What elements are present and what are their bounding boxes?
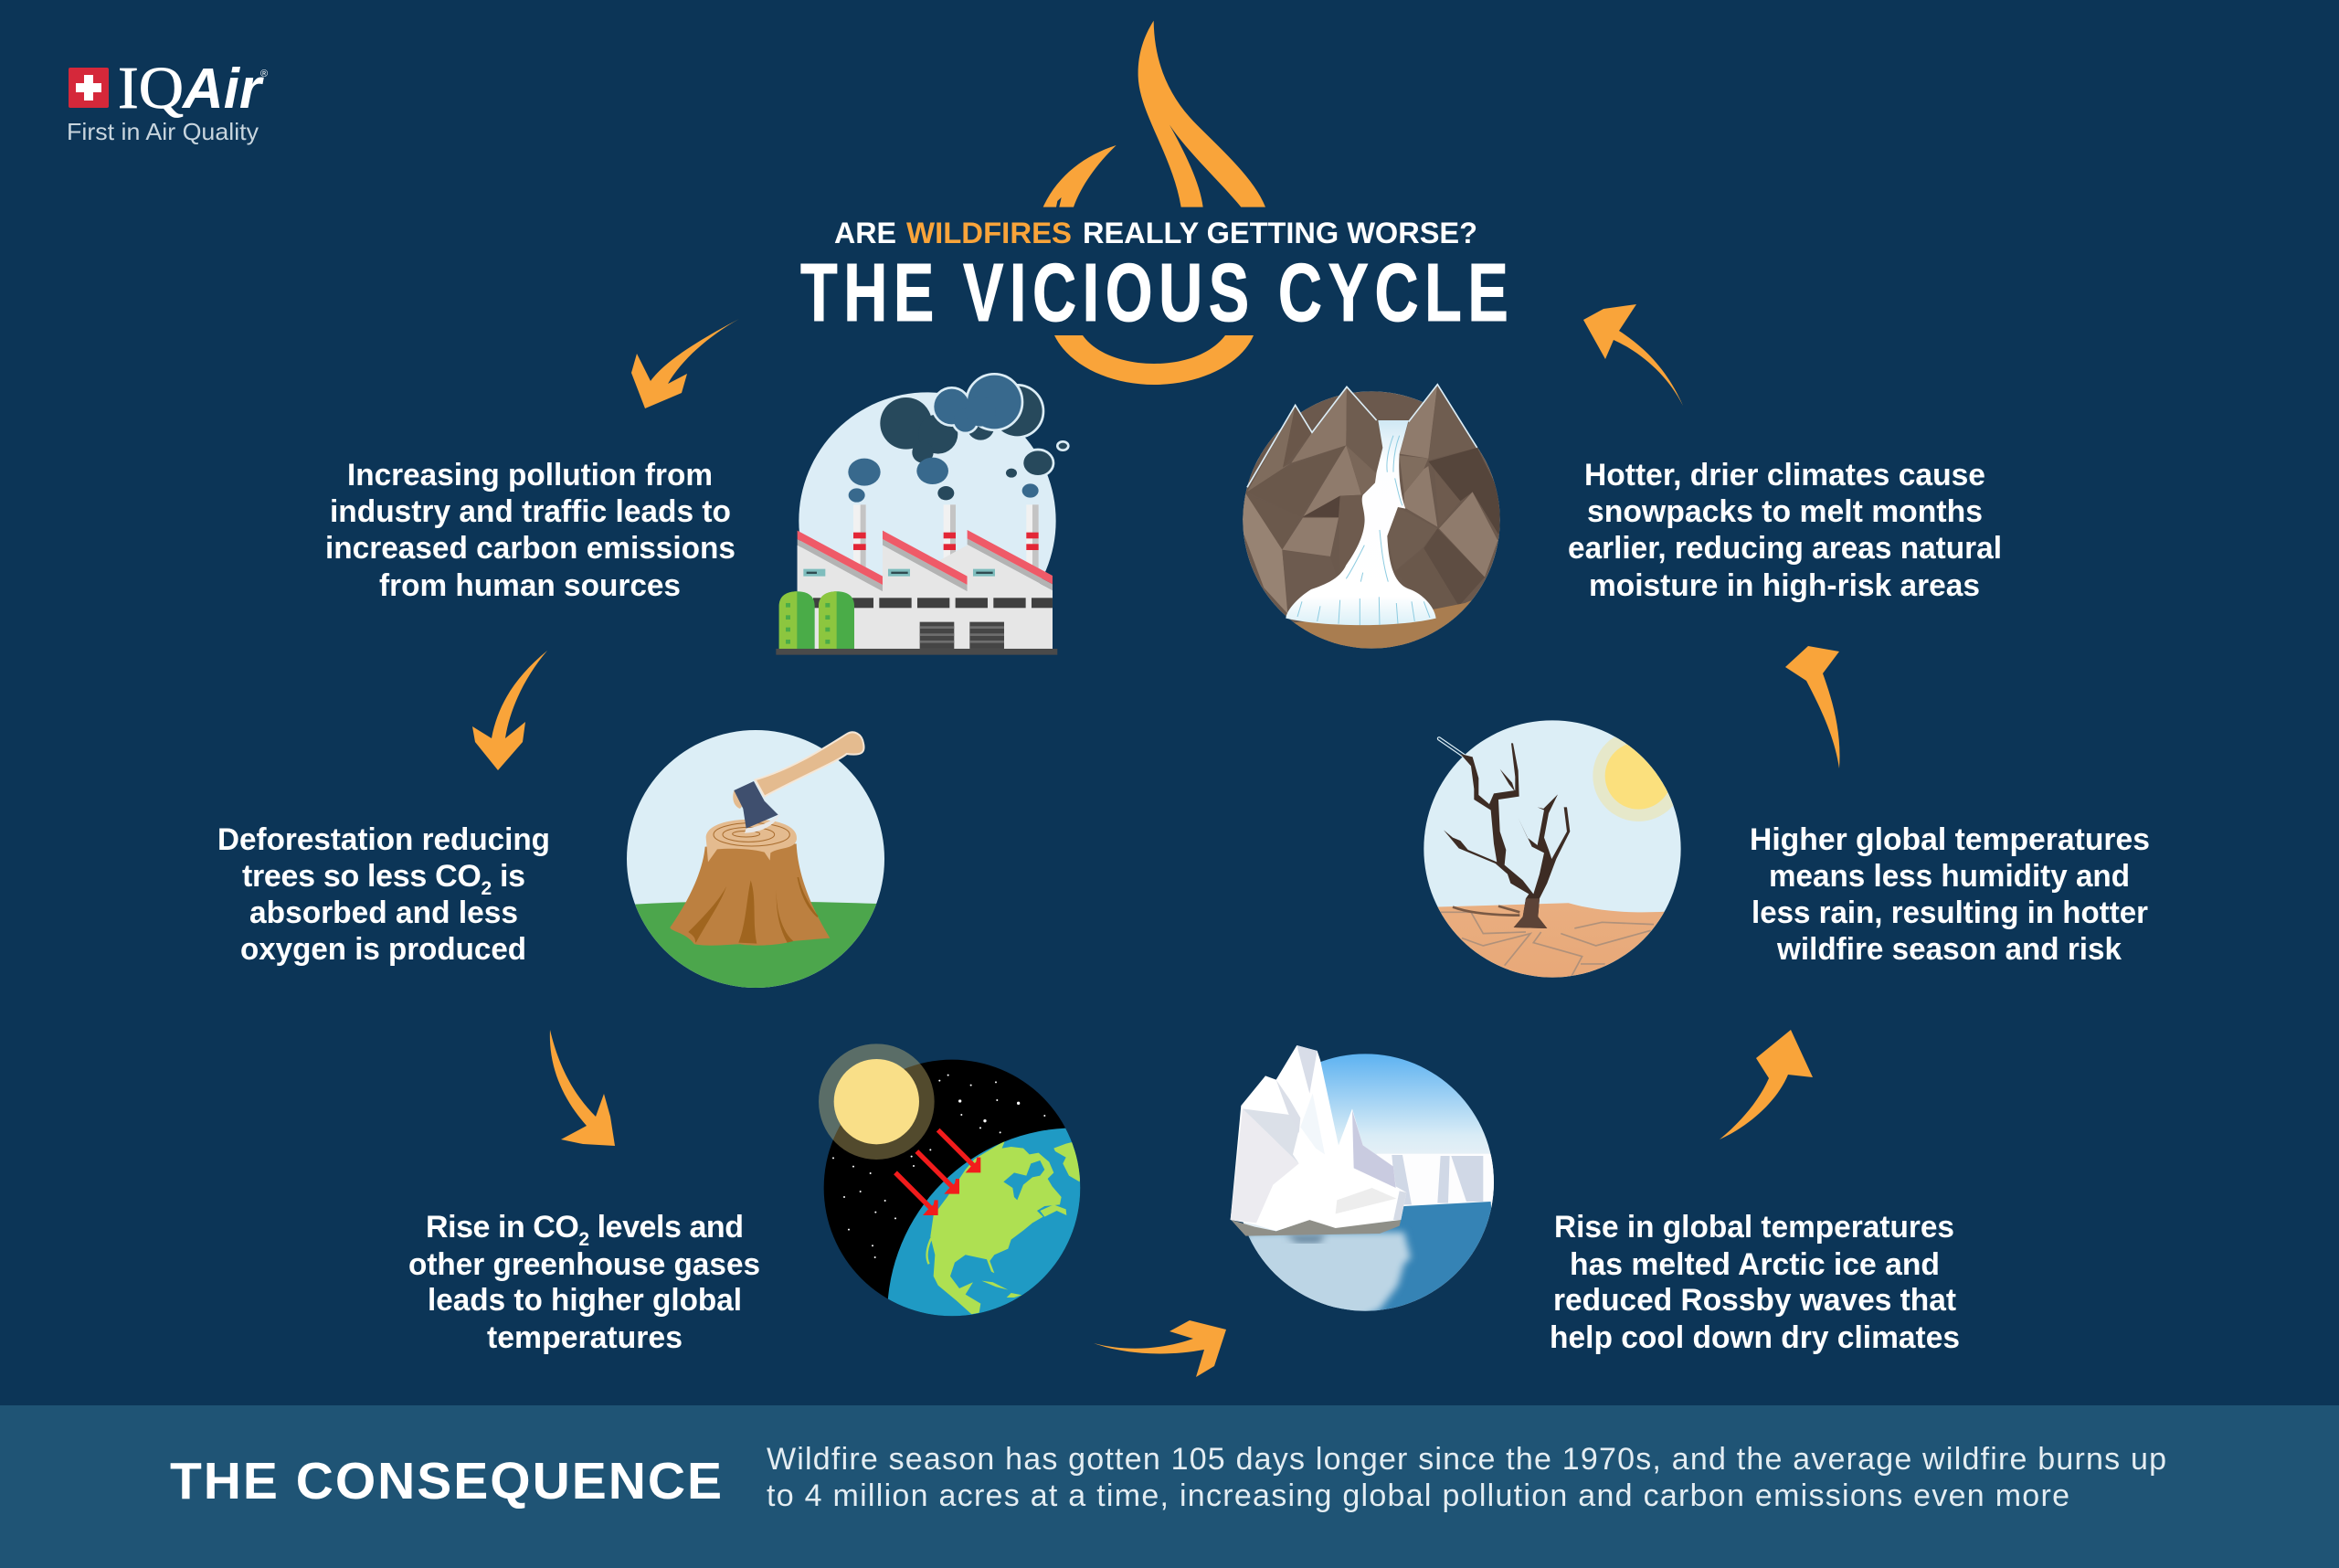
icon: dead tree in drought [1424, 720, 1684, 980]
arrow: right lower [1720, 1030, 1813, 1139]
text: deforestation: 2 [481, 878, 492, 899]
sun and parched ground [1438, 736, 1674, 978]
arrow: bottom [1094, 1320, 1226, 1377]
text: humidity: Higher global temperatures [1750, 822, 2150, 857]
text: greenhouse gases: temperatures [487, 1320, 683, 1355]
text: greenhouse gases: 2 [578, 1229, 589, 1250]
icon: iceberg [1231, 1045, 1498, 1322]
text: greenhouse gases: other greenhouse gases [408, 1247, 760, 1282]
silos [779, 591, 854, 649]
text: pollution: industry and traffic leads to [330, 494, 731, 529]
waterfall [1286, 420, 1436, 625]
iceberg body [1231, 1045, 1406, 1236]
footer body text: Wildfire season has gotten 105 days longer since the 1970s, and the average wildfire burns up [767, 1442, 2166, 1477]
text: pollution: increased carbon emissions [325, 531, 736, 566]
flame: lower arc [1054, 335, 1254, 385]
tree [1439, 738, 1570, 928]
text: deforestation: trees so less CO [242, 859, 482, 894]
grass [635, 902, 877, 988]
text: snowpacks: snowpacks to melt months [1587, 494, 1983, 529]
icon: axe in stump [627, 730, 884, 988]
subtitle: REALLY GETTING WORSE? [1083, 217, 1477, 249]
factory base [776, 649, 1057, 655]
text: deforestation: oxygen is produced [240, 932, 526, 967]
arrow: top right [1583, 304, 1683, 406]
text: greenhouse gases [408, 1210, 760, 1355]
footer panel: the consequence [0, 1405, 2339, 1568]
footer heading: THE CONSEQUENCE [170, 1452, 722, 1510]
shelf and water [1248, 1153, 1494, 1311]
text: humidity: wildfire season and risk [1776, 932, 2122, 967]
subtitle: ARE [834, 217, 896, 249]
stump and axe [670, 732, 864, 946]
text: greenhouse gases: levels and [589, 1210, 744, 1245]
arrow: right upper [1785, 646, 1840, 768]
text: arctic ice: Rise in global temperatures [1554, 1210, 1954, 1245]
text: greenhouse gases: Rise in CO [426, 1210, 579, 1245]
red heat arrows [895, 1130, 980, 1215]
footer body text: to 4 million acres at a time, increasing global pollution and carbon emissions even more [767, 1478, 2069, 1513]
text: humidity: means less humidity and [1769, 859, 2130, 894]
logo tagline: First in Air Quality [67, 118, 259, 145]
flame: upper tongues [1043, 21, 1265, 207]
arrow: top left [631, 319, 739, 408]
smoke [848, 376, 1068, 503]
icon: earth and sun [819, 1044, 1080, 1316]
subtitle: WILDFIRES [906, 217, 1072, 249]
sun [819, 1044, 935, 1160]
main title: THE VICIOUS CYCLE [800, 246, 1508, 338]
text: deforestation [217, 822, 550, 967]
text: deforestation: absorbed and less [249, 895, 518, 930]
text: snowpacks: moisture in high-risk areas [1589, 568, 1980, 603]
peak outline [1247, 387, 1377, 487]
text: humidity [1750, 822, 2150, 967]
factory building [798, 530, 1053, 649]
arrow: left upper [472, 651, 547, 770]
chimneys [853, 504, 1039, 568]
text: arctic ice [1550, 1210, 1960, 1355]
logo wordmark: IQ [118, 55, 184, 122]
text: greenhouse gases: leads to higher global [428, 1283, 742, 1318]
text: humidity: less rain, resulting in hotter [1752, 895, 2148, 930]
globe with North America [888, 1128, 1080, 1316]
logo: IQAir [67, 55, 268, 145]
text: pollution: from human sources [379, 568, 681, 603]
footer body text [767, 1442, 2166, 1513]
text: pollution: Increasing pollution from [347, 458, 713, 493]
stars [832, 1075, 1045, 1258]
text: snowpacks [1568, 458, 2002, 603]
icon: factory [776, 376, 1068, 655]
arrow: left lower [550, 1030, 615, 1146]
logo wordmark: Air [181, 58, 264, 121]
title block [800, 217, 1508, 338]
text: snowpacks: Hotter, drier climates cause [1584, 458, 1985, 493]
text: deforestation: is [492, 859, 525, 894]
text: deforestation: Deforestation reducing [217, 822, 550, 857]
text: arctic ice: help cool down dry climates [1550, 1320, 1960, 1355]
text: arctic ice: has melted Arctic ice and [1570, 1247, 1940, 1282]
text: pollution [325, 458, 736, 603]
text: snowpacks: earlier, reducing areas natural [1568, 531, 2002, 566]
rock facets [1240, 381, 1508, 652]
right peak outline [1409, 385, 1477, 448]
icon: mountain waterfall [1240, 381, 1508, 652]
text: arctic ice: reduced Rossby waves that [1553, 1283, 1956, 1318]
logo registered mark: ® [260, 69, 268, 79]
icon: Swiss cross [69, 68, 109, 108]
